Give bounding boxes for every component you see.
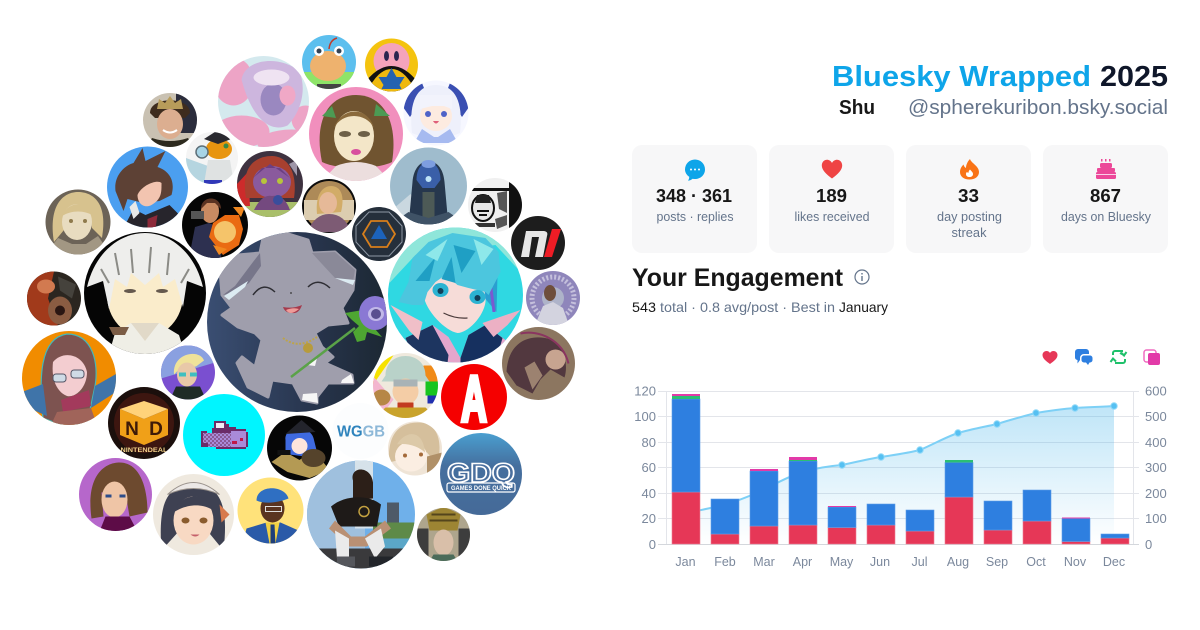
avatar: orange character with glasses [22,331,116,425]
stat card: day posting streak: streak [952,225,987,240]
cumulative area [686,406,1114,544]
line points [839,403,1117,468]
right axis labels [1145,384,1167,552]
month labels: Apr [793,555,812,569]
stat card: days on Bluesky: days on Bluesky [1061,209,1151,224]
left axis labels: 120 [634,384,656,398]
title: Bluesky Wrapped 2025: Bluesky Wrapped [832,61,1091,93]
stat card: day posting streak [906,145,1031,253]
avatar: red A logo: A [461,363,487,435]
month labels: Nov [1064,555,1087,569]
avatar: espurr large character [207,230,391,412]
month labels: May [830,555,854,569]
title: Bluesky Wrapped 2025: 2025 [1100,61,1168,93]
avatar: nintendeal cube logo: NINTENDEAL [120,447,168,454]
icon: cake [1096,159,1116,179]
month labels [675,555,1125,569]
right axis labels: 0 [1145,537,1152,552]
avatar: gundam officer on pride flag [372,352,438,418]
avatar: white haired anime man [84,232,206,354]
icon: likes heart [1042,351,1058,364]
avatar: person in gold headdress [416,506,470,562]
avatar: purple lulu [237,151,303,218]
bars: reposts (green) [672,396,973,462]
right axis labels: 500 [1145,409,1167,424]
month labels: Dec [1103,555,1125,569]
avatar: nintendeal cube logo [108,387,180,459]
month labels: Jan [675,555,696,569]
avatar: tali masked figure [390,147,468,226]
avatar: cyan pixel fish [183,394,265,476]
engagement summary: total · 0.8 avg/post · Best in [660,299,835,315]
bars: quotes (pink) [672,394,1090,518]
avatar: man with flaming fist [182,192,248,258]
avatar: games done quick logo [440,433,522,515]
avatar: crowned man [143,93,198,147]
left axis labels: 80 [642,435,656,450]
stat card: posts and replies: 348 · 361 [656,186,732,206]
icon: info [855,270,869,284]
icon: reposts arrows [1110,351,1126,363]
month labels: Jun [870,555,890,569]
avatar: photo of blonde woman [302,179,356,233]
avatar: blue haired girl on turtle [266,415,332,481]
icon: heart [822,160,842,178]
bars: replies (blue) [672,399,1129,542]
icon: replies bubbles [1075,349,1092,365]
month labels: Aug [947,555,969,569]
avatar: white haired chibi girl [403,80,469,146]
stat card: likes received: 189 [816,186,847,206]
icon: flame [960,159,979,180]
right axis labels: 600 [1145,384,1167,398]
stat card: days on Bluesky: 867 [1090,186,1121,206]
avatar: digimon with magnifier [186,130,238,185]
avatar: nintendeal cube logo: D [149,419,163,440]
avatar: bearded man on purple pattern [526,271,580,325]
avatar: wggb logo [332,403,388,459]
combined chart: monthly engagement bars and cumulative line [634,384,1167,569]
chart legend icons [1042,349,1160,365]
avatar: teal haired anime girl [388,227,524,363]
avatar: pink portrait lady [309,87,403,181]
user name and handle: @spherekuribon.bsky.social [908,97,1168,119]
avatar: kirby badge [364,38,418,95]
avatar: dark photo red face [27,272,81,326]
avatar: wggb logo: WGGB [337,424,385,440]
avatar: glasses man on purple [161,346,215,400]
left axis labels [634,384,656,552]
right axis labels: 200 [1145,486,1167,501]
month labels: Jul [912,555,927,569]
avatar: red A logo [441,363,507,435]
avatar: brown haired character on blue [106,146,188,228]
engagement summary: 543 [632,299,656,315]
avatar: pink octopus [218,56,309,147]
avatar: orange pikmin creature [302,35,356,90]
stat card: posts and replies: posts · replies [656,209,734,224]
avatar: man sitting outdoors [307,460,415,568]
left axis labels: 100 [634,409,656,424]
avatar: brown sepia headphones [502,326,576,400]
left axis labels: 40 [642,486,656,501]
stat card: day posting streak: 33 [958,186,979,206]
heading: Your Engagement: Your Engagement [632,264,844,292]
avatar: games done quick logo: GDQ [447,458,515,488]
month labels: Mar [753,555,775,569]
avatar: blonde anime woman [45,189,111,255]
right axis labels: 100 [1145,511,1167,526]
stat card: days on Bluesky [1043,145,1168,253]
left axis labels: 0 [649,537,656,552]
avatar: nintendo life logo [511,216,565,270]
stat card: likes received [769,145,894,253]
avatar bubble cluster [22,35,580,568]
grid lines [658,391,1139,544]
avatar: pixel art woman on purple [78,458,152,532]
right axis labels: 400 [1145,435,1167,450]
user name and handle: Shu [839,97,875,119]
month labels: Feb [714,555,736,569]
avatar: games done quick logo: GAMES DONE QUICK [451,485,511,492]
right axis labels: 300 [1145,460,1167,475]
cumulative line [686,406,1114,514]
icon: speech bubble [685,159,705,181]
left axis labels: 20 [642,511,656,526]
stat card: likes received: likes received [794,209,870,224]
avatar: hexagon badge [352,207,406,261]
avatar: tan haired anime girl [388,422,442,476]
engagement summary [632,299,888,315]
avatar: nintendeal cube logo: N [125,419,139,440]
month labels: Sep [986,555,1008,569]
avatar: maid anime girl [152,474,234,556]
icon: quotes squares [1144,350,1160,365]
month labels: Oct [1026,555,1046,569]
left axis labels: 60 [642,460,656,475]
engagement summary: January [839,299,888,315]
avatar: black and white manga panel [468,178,523,232]
avatar: man in cap on yellow [238,478,304,544]
bars: likes (red) [672,492,1129,544]
stat card: day posting streak: day posting [937,209,1002,224]
stat card: posts and replies [632,145,757,253]
